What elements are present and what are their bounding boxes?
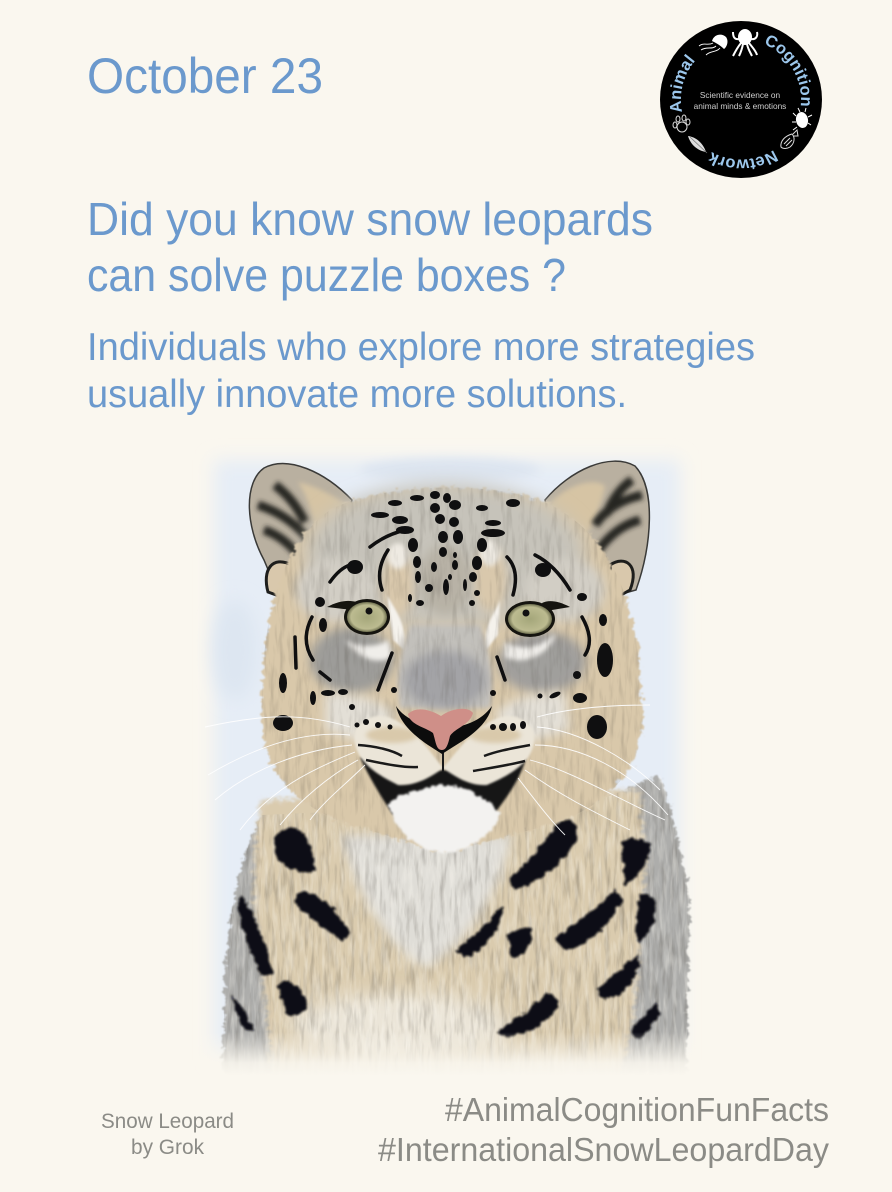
badge tagline: animal minds & emotions [694, 101, 786, 111]
body and chest fur [190, 775, 710, 1105]
hashtags: #InternationalSnowLeopardDay [378, 1131, 829, 1168]
badge tagline: Scientific evidence on [700, 90, 781, 100]
headline [87, 193, 653, 301]
headline: Did you know snow leopards [87, 193, 653, 245]
illustration: snow leopard portrait [190, 458, 710, 1105]
badge ring text: Network [708, 150, 778, 170]
snowy background [213, 458, 680, 1060]
image credit: by Grok [131, 1136, 204, 1159]
head base [261, 487, 643, 853]
fur texture on face [261, 487, 643, 853]
subheading [87, 326, 755, 416]
nose [396, 706, 492, 754]
image credit: Snow Leopard [101, 1110, 234, 1133]
hashtags [378, 1091, 829, 1168]
whiskers [205, 705, 668, 835]
subheading: Individuals who explore more strategies [87, 326, 755, 369]
left eye [327, 599, 390, 635]
badge ring text: Animal [670, 54, 695, 112]
logo badge: Animal Cognition Network [660, 21, 822, 178]
forehead and face fur [295, 483, 605, 745]
right eye [505, 601, 570, 637]
face markings [273, 491, 613, 739]
badge tagline [694, 90, 786, 111]
icon: octopus [733, 29, 757, 56]
ears [249, 461, 649, 610]
mouth and chin [354, 716, 534, 852]
badge disc [660, 21, 822, 178]
muzzle lobes [354, 716, 443, 785]
eyes [327, 599, 570, 637]
subheading: usually innovate more solutions. [87, 373, 627, 416]
body spots [233, 821, 660, 1040]
fur texture on body [222, 775, 690, 1075]
cheek gray patches [310, 627, 394, 693]
icon: beetle [792, 108, 812, 130]
lower fade [200, 1032, 700, 1076]
right ear [545, 461, 649, 600]
headline: can solve puzzle boxes ? [87, 249, 566, 301]
left ear [249, 464, 352, 610]
image credit [101, 1110, 234, 1159]
icon: fish [781, 130, 798, 148]
hashtags: #AnimalCognitionFunFacts [445, 1091, 829, 1128]
badge ring text: Cognition [766, 36, 811, 106]
icon: feather [688, 136, 707, 153]
icon: jellyfish [699, 35, 727, 55]
nose bridge [398, 625, 492, 708]
under-eye highlights [345, 640, 392, 661]
badge ring text [670, 36, 811, 170]
date heading: October 23 [87, 48, 323, 104]
head [205, 483, 668, 853]
icon: paw [673, 115, 690, 132]
